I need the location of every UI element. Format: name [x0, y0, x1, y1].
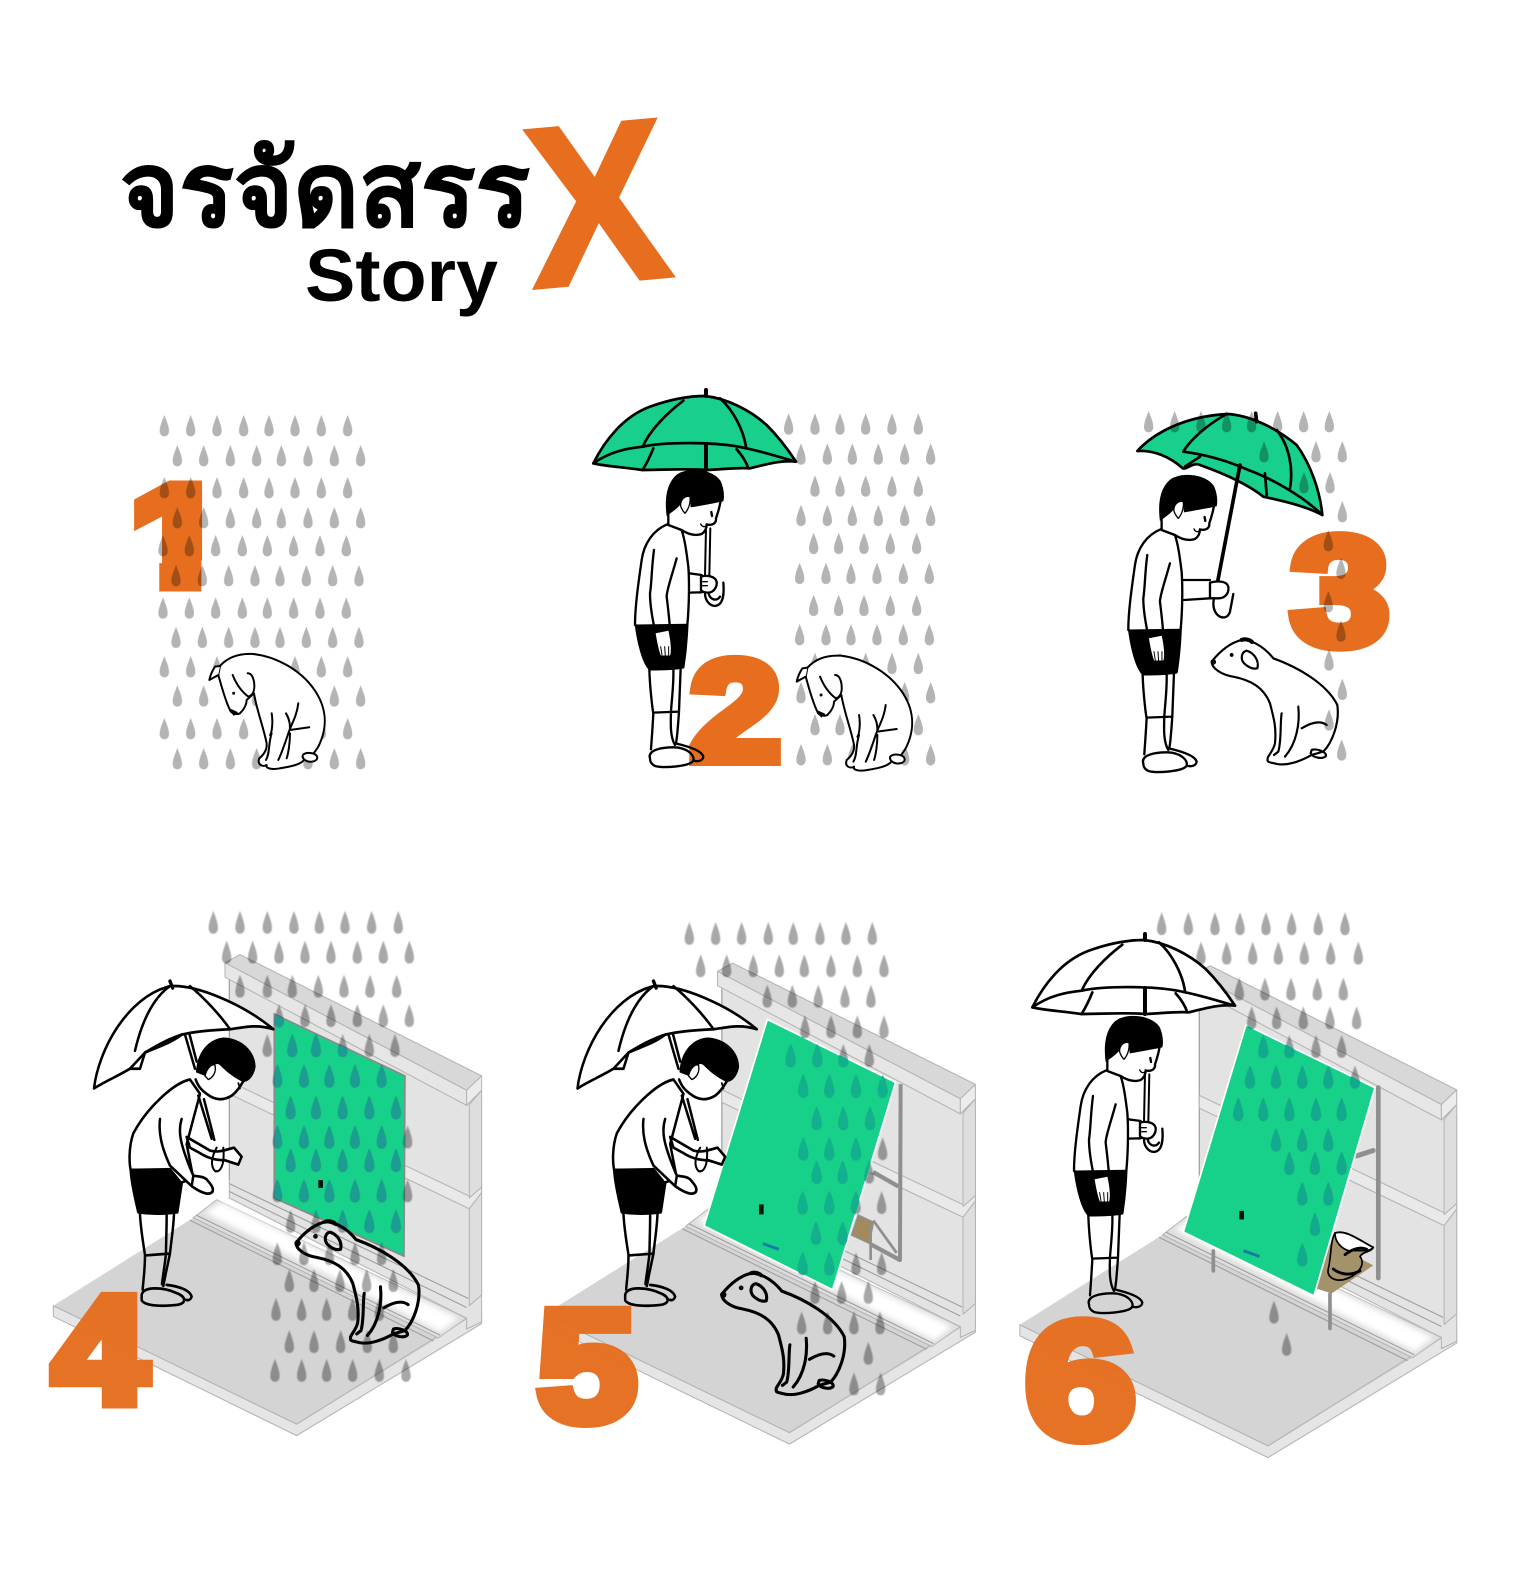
- wall and floor: [545, 963, 975, 1444]
- rain: [209, 911, 414, 1382]
- panel 5: boy tilts the board outward: [537, 922, 975, 1454]
- boy bending with white umbrella: [94, 981, 273, 1306]
- rain: [784, 413, 935, 765]
- sad dog: [209, 654, 325, 769]
- green umbrella: [593, 390, 796, 470]
- heading: orange X: X: [515, 70, 678, 336]
- number 4: 4: [53, 1266, 147, 1436]
- wall and floor: [1020, 966, 1457, 1458]
- rain seen on board: [1234, 1026, 1360, 1266]
- panel 6: dog shelters under the board: [1020, 912, 1457, 1473]
- boy with arm: [1074, 1016, 1163, 1313]
- heading: จรจัดสรร: จรจัดสรร: [120, 132, 530, 249]
- rain seen on board: [786, 1036, 888, 1282]
- rain seen on board: [274, 1014, 405, 1247]
- rain: [1157, 912, 1363, 1356]
- number 6: 6: [1025, 1288, 1136, 1473]
- folding frame and shelf: [852, 1084, 901, 1260]
- sad dog: [797, 656, 912, 771]
- white umbrella: [1032, 934, 1235, 1014]
- number 2: 2: [690, 632, 781, 791]
- heading: Story: Story: [305, 234, 498, 317]
- panel 3: boy tilts umbrella over the dog: [1128, 411, 1389, 772]
- boy bending with white umbrella: [577, 981, 757, 1306]
- panel 4: board on the wall, boy greets dog: [53, 911, 482, 1436]
- panel 2: boy with green umbrella sees the dog: [593, 390, 935, 791]
- boy with arm: [635, 470, 724, 767]
- green tilted board: [704, 1019, 896, 1290]
- number 3: 3: [1291, 506, 1389, 676]
- dog: [296, 1221, 419, 1343]
- title: [120, 70, 678, 336]
- arm and tilted green umbrella: [1137, 413, 1322, 617]
- green board: [274, 1014, 405, 1256]
- frame, shelf and curled dog: [1213, 1088, 1378, 1328]
- rain: [685, 922, 889, 1395]
- panel 1: dog alone in the rain: [131, 415, 365, 769]
- green tilted board: [1183, 1025, 1375, 1296]
- rain: [1144, 411, 1347, 761]
- number 1: 1: [131, 458, 225, 615]
- boy: [1128, 475, 1217, 772]
- wall and floor: [53, 955, 482, 1436]
- number 5: 5: [537, 1278, 637, 1454]
- dog: [722, 1273, 845, 1395]
- rain: [158, 415, 365, 769]
- happy dog: [1212, 639, 1338, 764]
